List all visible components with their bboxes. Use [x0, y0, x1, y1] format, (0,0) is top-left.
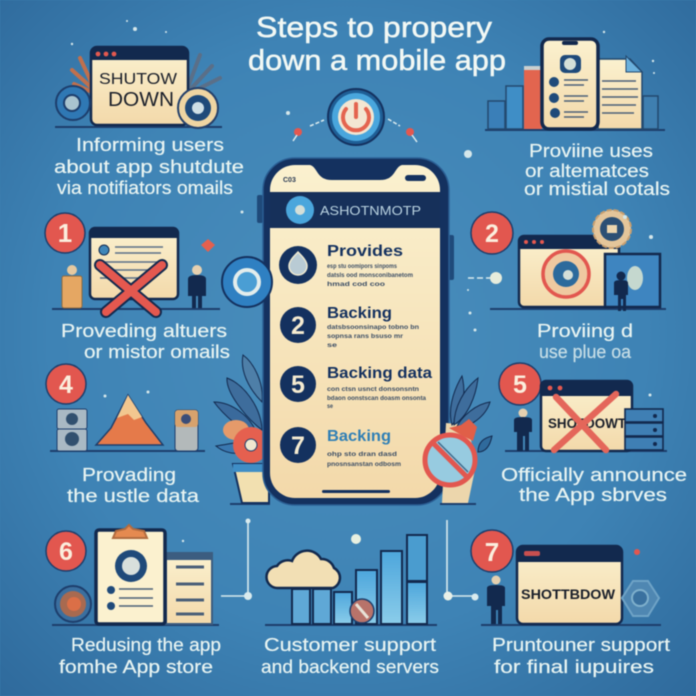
caption: or mistial ootals [524, 179, 670, 199]
icon: window with target and person [468, 210, 666, 311]
list item: Backing 7: 7 [291, 432, 305, 460]
title [248, 12, 506, 77]
icon: cloud and bars [265, 535, 437, 626]
list item: Backing data: bdaon oonstscan doasm onsonta [327, 396, 427, 402]
icon: shutdown window and person: SHOTTBDOW [521, 586, 616, 602]
list item: Backing 7: pnosnsanstan odbosm [327, 462, 401, 468]
icon: crossed window with people [52, 228, 220, 312]
caption: for final iupuires [494, 657, 654, 677]
list item: Backing 7: Backing [327, 428, 391, 445]
caption: Officially announce [501, 465, 687, 485]
badge: 2: 2 [485, 220, 499, 248]
caption [61, 321, 230, 362]
icon: blue ring button [222, 257, 272, 307]
panel: shutdown notice [54, 47, 244, 198]
phone [257, 158, 454, 505]
list item: Provides: Provides [327, 243, 403, 260]
list item: Backing data: con ctsn usnct donsonsntn [327, 387, 419, 393]
caption: and backend servers [261, 657, 439, 677]
caption [67, 465, 200, 506]
list item: Backing: se [327, 343, 338, 349]
badge: 4 [46, 364, 86, 404]
badge: 1: 1 [58, 218, 72, 248]
decoration: left plant [214, 355, 270, 505]
caption: Pruntouner support [492, 635, 670, 655]
caption [492, 635, 670, 677]
badge: 2 [471, 212, 513, 254]
caption: Proviing d [537, 321, 633, 341]
list item: Backing 7: ohp sto dran dasd [327, 452, 397, 458]
list item: Provides: esp stu oomipors sinpoms [327, 264, 398, 270]
caption [537, 321, 633, 362]
caption: Informing users [76, 135, 224, 155]
badge: 5 [499, 363, 541, 405]
list item: Backing data: se [327, 404, 334, 410]
screen header: ASHOTNMOTP [320, 203, 421, 218]
list item: Backing: Backing [327, 305, 392, 322]
badge: 6 [46, 531, 86, 571]
status indicators [283, 175, 426, 184]
list item: Backing: sopnsa rans bsuso mr [327, 334, 404, 340]
caption: Proviine uses [529, 141, 653, 161]
phone screen [270, 165, 440, 498]
panel: customer support [261, 535, 439, 677]
list item: Backing data [280, 365, 432, 410]
caption: about app shutdute [54, 157, 244, 177]
status indicators: C03 [283, 177, 296, 184]
badge: 7 [471, 530, 513, 572]
caption [501, 465, 687, 505]
list item: Provides [279, 243, 413, 288]
connector: left [221, 518, 252, 600]
caption: Provading [82, 465, 176, 485]
list item: Backing 7 [280, 427, 401, 468]
list item: Backing [280, 305, 419, 349]
caption [524, 141, 670, 199]
list item: Provides: datsls ood monsconibanetom [327, 273, 413, 279]
decoration: right plant and prohibited sign [425, 376, 492, 505]
icon: crossed shutdown window [505, 381, 667, 452]
list item: Backing: 2 [291, 312, 305, 340]
caption: use plue oa [539, 342, 632, 362]
icon: crossed shutdown window: SHOTDOWT [548, 415, 626, 431]
badge: 4: 4 [59, 371, 73, 399]
caption: Redusing the app [71, 635, 221, 655]
phone body [263, 158, 449, 505]
badge: 1 [45, 213, 85, 253]
panel: alternatives [485, 39, 670, 199]
caption: Customer support [264, 635, 436, 655]
title: down a mobile app [248, 45, 506, 77]
screen header [270, 192, 440, 228]
caption: Proveding altuers [61, 321, 227, 341]
list item: Backing: datsbsoonsinapo tobno bn [327, 325, 419, 331]
panel: step 2 [468, 210, 666, 362]
caption: the App sbrves [519, 485, 667, 505]
list item: Backing data: 5 [291, 371, 305, 399]
list item: Provides: hmad cod coo [327, 282, 385, 288]
caption: via notifiators omails [57, 178, 233, 198]
caption [54, 135, 244, 198]
home indicator [322, 490, 390, 493]
badge: 5: 5 [513, 371, 527, 399]
badge: 7: 7 [485, 537, 499, 567]
panel: step 5 [499, 363, 687, 505]
list item: Backing data: Backing data [327, 365, 432, 382]
connector: right [351, 520, 478, 600]
notch [310, 165, 402, 180]
caption: or altematces [525, 161, 649, 181]
panel: step 4 [46, 364, 205, 506]
title: Steps to propery [256, 12, 493, 44]
decoration: sparkles [71, 20, 655, 542]
caption [59, 635, 221, 677]
side buttons [257, 195, 454, 280]
icon: shutdown window and person [481, 546, 661, 626]
icon: shutdown window [55, 47, 222, 128]
badge: 6: 6 [59, 538, 73, 566]
caption [261, 635, 439, 677]
icon: clipboard and list [52, 525, 219, 626]
caption: or mistor omails [84, 342, 230, 362]
caption: fomhe App store [59, 657, 213, 677]
panel: step 6 [46, 525, 221, 677]
icon: mountain with servers [50, 395, 205, 452]
caption: the ustle data [67, 486, 200, 506]
panel: step 1 [45, 213, 230, 362]
panel: step 7 [471, 530, 670, 677]
icon: shutdown window: DOWN [108, 89, 174, 111]
icon: shutdown window: SHUTOW [99, 71, 178, 88]
icon: power button [293, 89, 417, 145]
icon: phone, document and bars [485, 39, 665, 131]
